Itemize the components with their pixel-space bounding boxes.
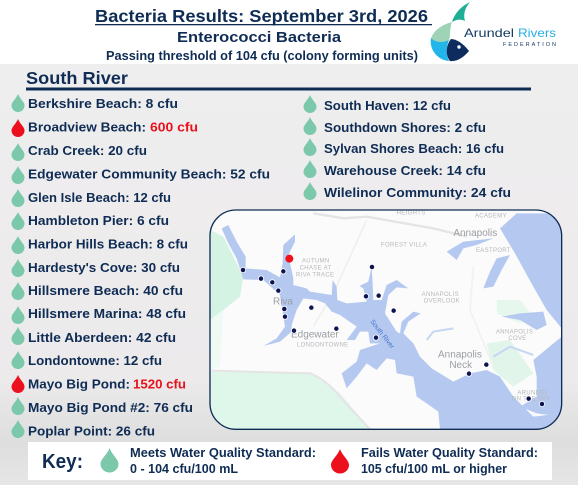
logo: Arundel Rivers Federation: Rivers bbox=[518, 26, 556, 40]
row: Hambleton Pier: Hambleton Pier: 6 cfu bbox=[28, 213, 169, 228]
row: Southdown Shores: Southdown Shores: 2 cfu bbox=[324, 120, 486, 135]
meets standard text bbox=[130, 445, 316, 476]
map of South River sampling sites: FOREST VILLA bbox=[381, 242, 427, 248]
subtitle: Enterococci Bacteria bbox=[177, 29, 342, 46]
row: Little Aberdeen: Little Aberdeen: 42 cfu bbox=[28, 330, 176, 345]
map of South River sampling sites: ANNAPOLIS bbox=[422, 292, 459, 298]
row: Mayo Big Pond: Mayo Big Pond: bbox=[28, 376, 130, 392]
map of South River sampling sites: RIVA TRACE bbox=[296, 272, 334, 278]
map of South River sampling sites: AUTUMN bbox=[302, 259, 330, 265]
row: Glen Isle Beach: Glen Isle Beach: 12 cfu bbox=[28, 190, 171, 205]
map of South River sampling sites: Annapolis bbox=[438, 350, 482, 361]
row: Hardesty's Cove: Hardesty's Cove: 30 cfu bbox=[28, 260, 180, 275]
map of South River sampling sites: OVERLOOK bbox=[424, 299, 460, 305]
map of South River sampling sites: ACADEMY bbox=[475, 214, 507, 220]
icon: green drop bbox=[100, 448, 118, 472]
map of South River sampling sites: LONDONTOWNE bbox=[297, 342, 348, 348]
row: Mayo Big Pond bbox=[12, 375, 186, 393]
meets standard text: 0 - 104 cfu/100 mL bbox=[130, 461, 238, 476]
map of South River sampling sites: Riva bbox=[273, 297, 293, 308]
key panel bbox=[28, 442, 552, 480]
fails standard text bbox=[361, 445, 538, 476]
map of South River sampling sites: CHASE AT bbox=[300, 265, 331, 271]
heading: South River: South River bbox=[26, 68, 128, 88]
row: Mayo Big Pond #2: Mayo Big Pond #2: 76 cfu bbox=[28, 400, 193, 415]
row: Broadview Beach: Broadview Beach: bbox=[28, 120, 146, 134]
row: Hillsmere Marina: Hillsmere Marina: 48 cfu bbox=[28, 306, 186, 321]
map of South River sampling sites: HEIGHTS bbox=[397, 211, 426, 217]
title: Bacteria Results: September 3rd, 2026 bbox=[95, 6, 428, 26]
map of South River sampling sites: ANNAPOLIS bbox=[496, 329, 533, 335]
row: Warehouse Creek: Warehouse Creek: 14 cfu bbox=[324, 163, 486, 178]
meets standard text: Meets Water Quality Standard: bbox=[130, 445, 316, 460]
map of South River sampling sites: ON THE BAY bbox=[512, 397, 551, 403]
row: Sylvan Shores Beach: Sylvan Shores Beach: 16 cfu bbox=[324, 141, 504, 156]
row: Mayo Big Pond: 1520 cfu bbox=[133, 376, 186, 392]
map of South River sampling sites: EASTPORT bbox=[476, 248, 511, 254]
threshold note: Passing threshold of 104 cfu (colony forming units) bbox=[106, 49, 418, 63]
map of South River sampling sites: COVE bbox=[508, 336, 527, 342]
map of South River sampling sites: ARUNDEL bbox=[517, 390, 549, 396]
map of South River sampling sites: South River bbox=[368, 319, 396, 351]
icon: red drop bbox=[331, 449, 349, 474]
fails standard text: Fails Water Quality Standard: bbox=[361, 445, 538, 460]
row: Berkshire Beach: Berkshire Beach: 8 cfu bbox=[28, 96, 178, 111]
row: Hillsmere Beach: Hillsmere Beach: 40 cfu bbox=[28, 283, 183, 298]
map of South River sampling sites: Neck bbox=[449, 360, 472, 371]
logo: Arundel Rivers Federation bbox=[431, 2, 556, 61]
row: Poplar Point: Poplar Point: 26 cfu bbox=[28, 424, 155, 438]
row: Crab Creek: Crab Creek: 20 cfu bbox=[28, 143, 147, 158]
row: South Haven: South Haven: 12 cfu bbox=[324, 98, 451, 113]
row: Londontowne: Londontowne: 12 cfu bbox=[28, 353, 162, 368]
row: Poplar Point bbox=[12, 420, 155, 438]
map of South River sampling sites: Annapolis bbox=[453, 228, 497, 239]
logo: Arundel Rivers Federation: Arundel bbox=[464, 26, 514, 40]
divider bbox=[26, 88, 531, 90]
map of South River sampling sites bbox=[210, 210, 562, 429]
fails standard text: 105 cfu/100 mL or higher bbox=[361, 461, 507, 476]
row: Edgewater Community Beach: Edgewater Community Beach: 52 cfu bbox=[28, 166, 270, 182]
row: Broadview Beach bbox=[12, 119, 198, 137]
row: Harbor Hills Beach: Harbor Hills Beach: 8 cfu bbox=[28, 236, 188, 252]
row: Broadview Beach: 600 cfu bbox=[150, 120, 198, 134]
logo: Arundel Rivers Federation: FEDERATION bbox=[503, 42, 556, 48]
map of South River sampling sites: Edgewater bbox=[291, 329, 339, 340]
key label: Key: bbox=[42, 451, 83, 473]
row: Wilelinor Community: Wilelinor Community: 24 cfu bbox=[324, 185, 511, 200]
